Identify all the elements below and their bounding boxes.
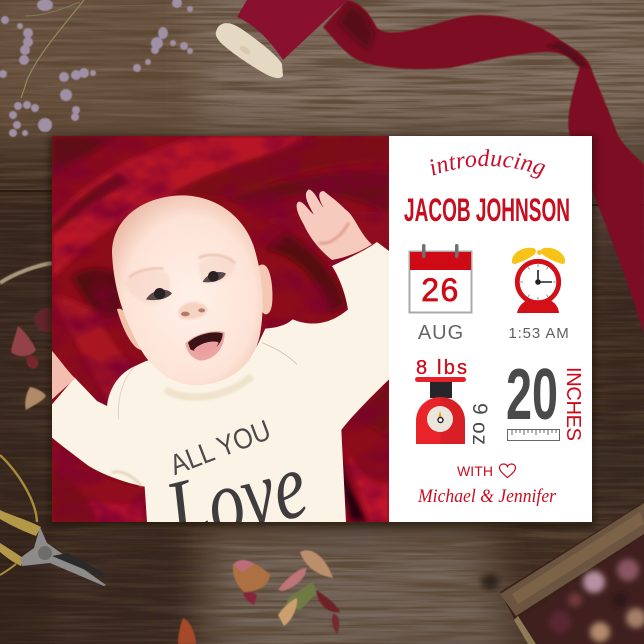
label: inches: INCHES [562,367,584,441]
icon: kitchen scale [415,377,466,444]
left eye [146,288,172,300]
icon: ruler [508,430,560,440]
panel: white details [52,136,592,522]
icon: heart [500,464,516,478]
heading: introducing: introducing [430,149,546,179]
panel: baby photo [52,136,389,522]
baby right hand [297,189,372,260]
shirt lettering: Love [155,431,316,567]
label: with: WITH [457,463,493,479]
dried lavender sprigs [0,0,193,137]
red velvet blanket [52,136,389,522]
right eye [203,271,226,282]
wheat stalk [0,263,52,283]
label: time: 1:53 AM [508,325,570,342]
box of dried petals [481,502,644,644]
shirt lettering: ALL YOU [166,414,275,482]
stat: length number: 20 [506,355,558,435]
label: month: AUG [418,322,464,344]
shirt lettering [169,420,306,522]
card shadow [49,136,595,527]
scissors [0,455,106,586]
text: parents: Michael & Jennifer [417,486,557,507]
rose petals on table [178,550,340,644]
baby left hand [52,351,75,399]
icon: calendar date [410,244,472,312]
ribbon [323,0,644,335]
label: pounds: 8 lbs [416,357,467,379]
face [112,195,263,385]
nose [178,302,208,319]
icon: alarm clock [512,248,565,313]
left ear [117,309,143,350]
baby sleeve and body [52,242,389,522]
right ear [259,265,272,314]
label: ounces: 9 oz [468,403,491,445]
dried petals left [11,308,52,410]
icon: calendar date: 26 [421,272,460,308]
baby head [112,195,272,385]
ribbon spool [216,0,347,78]
eye shadows [124,257,235,304]
card [52,136,592,522]
open mouth [185,331,225,361]
